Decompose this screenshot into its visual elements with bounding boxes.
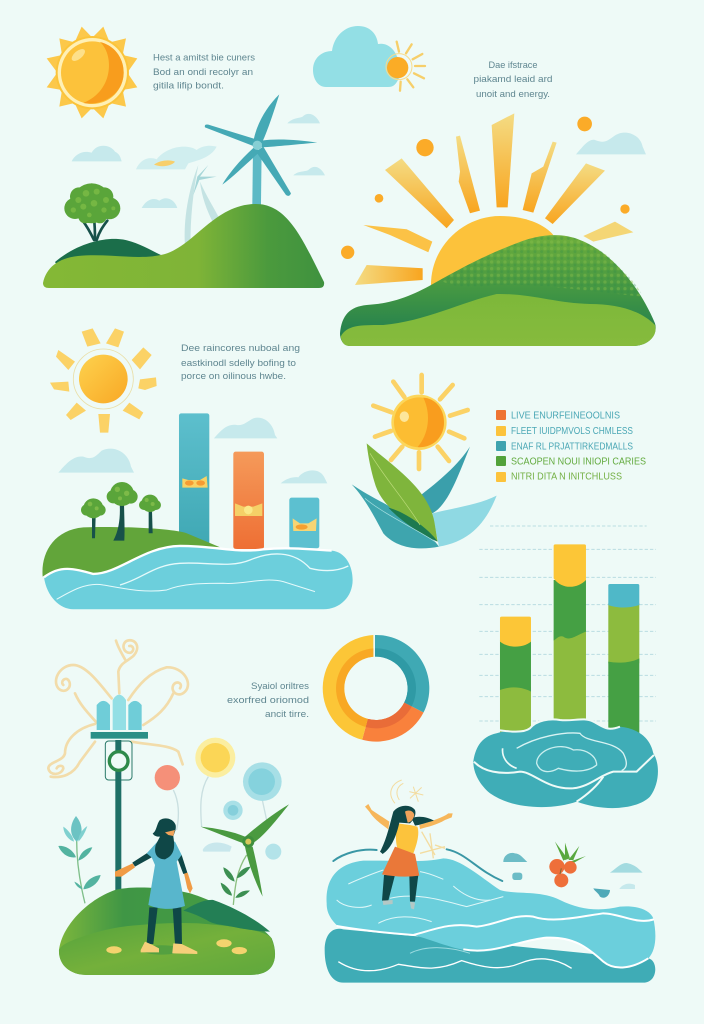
panel: sun, bars and water [42,328,353,609]
bar 1 [500,617,531,733]
panel: stacked bar chart with cloud base [323,526,658,808]
panel: small cloud with sun [313,26,552,100]
panel: big sunrise over hill [340,113,656,346]
panel: person with pole and turbine [48,640,289,975]
icon: right plant [221,855,251,905]
icon: blue cloud [313,26,399,87]
icon: sparkles [391,780,445,858]
legend [496,410,646,482]
panel: sun and wind turbine hill [43,27,325,288]
icon: sun orbs [341,117,630,259]
icon: orange fruit [549,842,586,887]
icon: sun rays [355,113,633,285]
icon: pale cloud [576,133,646,154]
wave highlights [337,913,654,971]
icon: hill with texture [340,235,656,346]
icon: light upper wave [327,858,655,968]
chart: donut [323,635,429,742]
text block: bars caption: Dee raincores nuboal ang [181,343,300,354]
bar: orange [233,452,264,549]
icon: green island [42,527,220,577]
panel: woman on waves [325,780,655,983]
panel: sun and leaves [352,375,497,548]
icon: green hill [43,204,324,288]
text block: sun caption: gitila lifip bondt. [153,80,224,92]
icon: three trees [81,482,161,541]
text block: sun caption [153,52,255,92]
text block: ring caption: ancit tirre. [265,709,309,720]
text block: ring caption [227,681,309,720]
text block: bars caption: eastkinodl sdelly bofing to [181,358,296,369]
icon: grassy hill [59,887,275,975]
text block: ring caption: Syaiol oriltres [251,681,309,692]
icon: glass cylinders on platform [91,695,148,739]
icon: balloons [155,738,282,860]
text block: energy caption: Dae ifstrace [488,60,538,71]
icon: water with waves [44,546,353,609]
icon: pale clouds [58,418,327,483]
icon: coins [106,939,247,954]
icon: cloud brain base [473,719,658,808]
icon: wave crest strokes [333,849,502,881]
icon: pole with ring [105,740,132,905]
icon: spiky sun [47,27,137,118]
icon: person [115,818,197,954]
text block: sun caption: Bod an ondi recolyr an [153,67,253,78]
icon: setting sun [431,216,553,287]
icon: green turbine [201,804,289,897]
icon: tree [64,183,120,240]
text block: bars caption: porce on oilinous hwbe. [181,371,286,382]
text block: ring caption: exorfred oriomod [227,695,309,706]
bar 3 [608,584,639,733]
legend item 5: NITRI DITA N INITCHLUSS [511,472,622,482]
bar 2 [554,544,586,723]
icon: leaves [352,443,497,548]
icon: sun with block rays [50,328,157,433]
icon: dark lower wave [325,929,655,983]
icon: sun with line rays [373,375,468,469]
icon: pale clouds [72,114,325,208]
icon: distant pale turbine [185,165,219,245]
legend item 1: LIVE ENURFEINEOOLNIS [511,410,620,422]
bar: teal tall [179,413,209,547]
bar: teal short [289,498,319,548]
icon: wind turbine [205,94,317,205]
legend item 4: SCAOPEN NOUI INIOPI CARIES [511,456,646,468]
legend item 2: FLEET IUIDPMVOLS CHMLESS [511,426,633,437]
icon: small clouds [503,853,643,898]
icon: curled energy lines [48,640,188,777]
text block: energy caption [474,60,552,100]
text block: energy caption: unoit and energy. [476,89,550,100]
text block: energy caption: piakamd leaid ard [474,74,552,85]
icon: woman [365,804,453,909]
icon: dark hill behind tree [55,239,165,270]
legend item 3: ENAF RL PRJATTIRKEDMALLS [511,442,633,452]
icon: left plant [58,816,101,903]
text block: sun caption: Hest a amitst bie cuners [153,52,255,64]
icon: small sun [386,42,425,91]
text block: bars caption [181,343,300,382]
